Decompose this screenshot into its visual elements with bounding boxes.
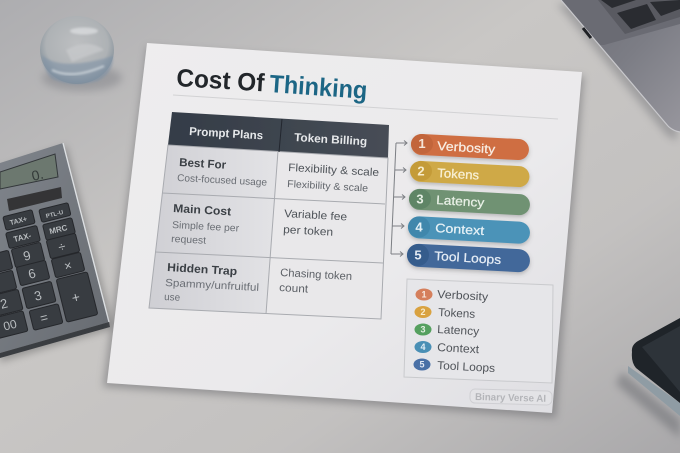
pill: context — [408, 216, 530, 244]
bracket arrows — [391, 140, 407, 256]
calculator key labels — [0, 210, 82, 334]
calculator key labels: TAX- — [13, 231, 33, 244]
title: Thinking — [269, 70, 368, 105]
legend: latency — [414, 324, 480, 338]
table header — [168, 112, 389, 158]
legend: context: 4 — [420, 342, 426, 352]
paper sheet — [107, 43, 582, 413]
legend: context — [414, 341, 480, 356]
calculator key labels: TAX+ — [9, 216, 28, 227]
row: best for: Flexibility & scale — [288, 162, 379, 179]
calculator — [0, 143, 114, 362]
legend: verbosity: 1 — [421, 290, 427, 300]
row: main cost: Main Cost — [173, 203, 232, 218]
glass paperweight — [40, 16, 122, 91]
row: main cost: request — [171, 234, 207, 247]
title divider — [173, 95, 558, 119]
watermark badge: Binary Verse AI — [475, 392, 546, 405]
row: best for: Cost-focused usage — [177, 173, 268, 189]
row: best for — [177, 157, 379, 195]
pill: tool loops — [406, 243, 531, 273]
calculator key labels: × — [62, 257, 73, 274]
legend: tokens: 2 — [420, 307, 426, 317]
calculator key labels: PTL-U — [45, 210, 64, 220]
legend: tool loops: Tool Loops — [437, 360, 496, 375]
row: hidden trap: Spammy/unfruitful — [165, 277, 259, 294]
pill: context: Context — [435, 221, 485, 238]
pill: latency: 3 — [416, 192, 424, 206]
legend: tokens — [414, 306, 476, 321]
table body — [149, 145, 388, 319]
calculator key labels: ÷ — [57, 238, 67, 255]
title — [176, 64, 368, 105]
row: main cost: Variable fee — [284, 208, 347, 224]
legend: tokens: Tokens — [438, 307, 476, 321]
calculator key labels: 6 — [27, 265, 37, 282]
laptop corner — [557, 0, 680, 140]
row: hidden trap: use — [164, 292, 181, 304]
calculator key labels: MRC — [48, 223, 69, 236]
row: hidden trap: count — [279, 282, 308, 296]
pill: verbosity — [411, 133, 529, 161]
phone corner — [616, 318, 680, 438]
solar strip — [7, 187, 62, 211]
row: best for: Best For — [179, 157, 227, 172]
legend: latency: 3 — [420, 324, 426, 334]
table grid — [149, 145, 388, 319]
pill: verbosity: Verbosity — [437, 139, 496, 157]
pill: tokens: 2 — [417, 164, 425, 178]
pill: latency — [409, 188, 530, 216]
row: main cost — [171, 203, 347, 247]
header labels — [189, 126, 367, 148]
calculator key labels: 3 — [33, 287, 43, 304]
calculator display: 0. — [30, 166, 45, 184]
header labels: Token Billing — [294, 132, 367, 148]
calculator display — [0, 154, 58, 189]
row: main cost: Simple fee per — [172, 220, 240, 235]
legend box — [404, 279, 553, 383]
row: best for: Flexibility & scale — [287, 179, 369, 195]
calculator keys — [0, 203, 98, 339]
left column shade — [149, 145, 278, 314]
calculator key labels: + — [70, 288, 82, 306]
title: Cost Of — [176, 64, 266, 97]
calculator key labels: 9 — [22, 247, 32, 264]
paper shadow — [103, 47, 584, 418]
legend: verbosity: Verbosity — [437, 289, 489, 304]
calculator key labels: = — [38, 309, 49, 326]
row: hidden trap: Chasing token — [280, 267, 352, 283]
pill: tool loops: Tool Loops — [434, 249, 502, 267]
row: hidden trap — [164, 262, 352, 304]
legend: context: Context — [437, 342, 480, 356]
row: main cost: per token — [283, 224, 333, 239]
pill: latency: Latency — [436, 193, 485, 210]
header labels: Prompt Plans — [189, 126, 263, 142]
pill: tool loops: 5 — [414, 248, 422, 262]
legend: tool loops — [414, 358, 496, 375]
legend: tool loops: 5 — [419, 360, 425, 370]
pill: context: 4 — [415, 220, 423, 234]
pill: tokens — [410, 160, 530, 188]
legend: verbosity — [416, 288, 489, 304]
calculator key labels: 00 — [2, 317, 19, 334]
pill: tokens: Tokens — [437, 166, 480, 183]
comparison table — [149, 112, 389, 319]
pill: verbosity: 1 — [418, 136, 426, 151]
row: hidden trap: Hidden Trap — [167, 262, 237, 278]
laptop keys — [601, 0, 680, 29]
legend: latency: Latency — [437, 324, 480, 338]
